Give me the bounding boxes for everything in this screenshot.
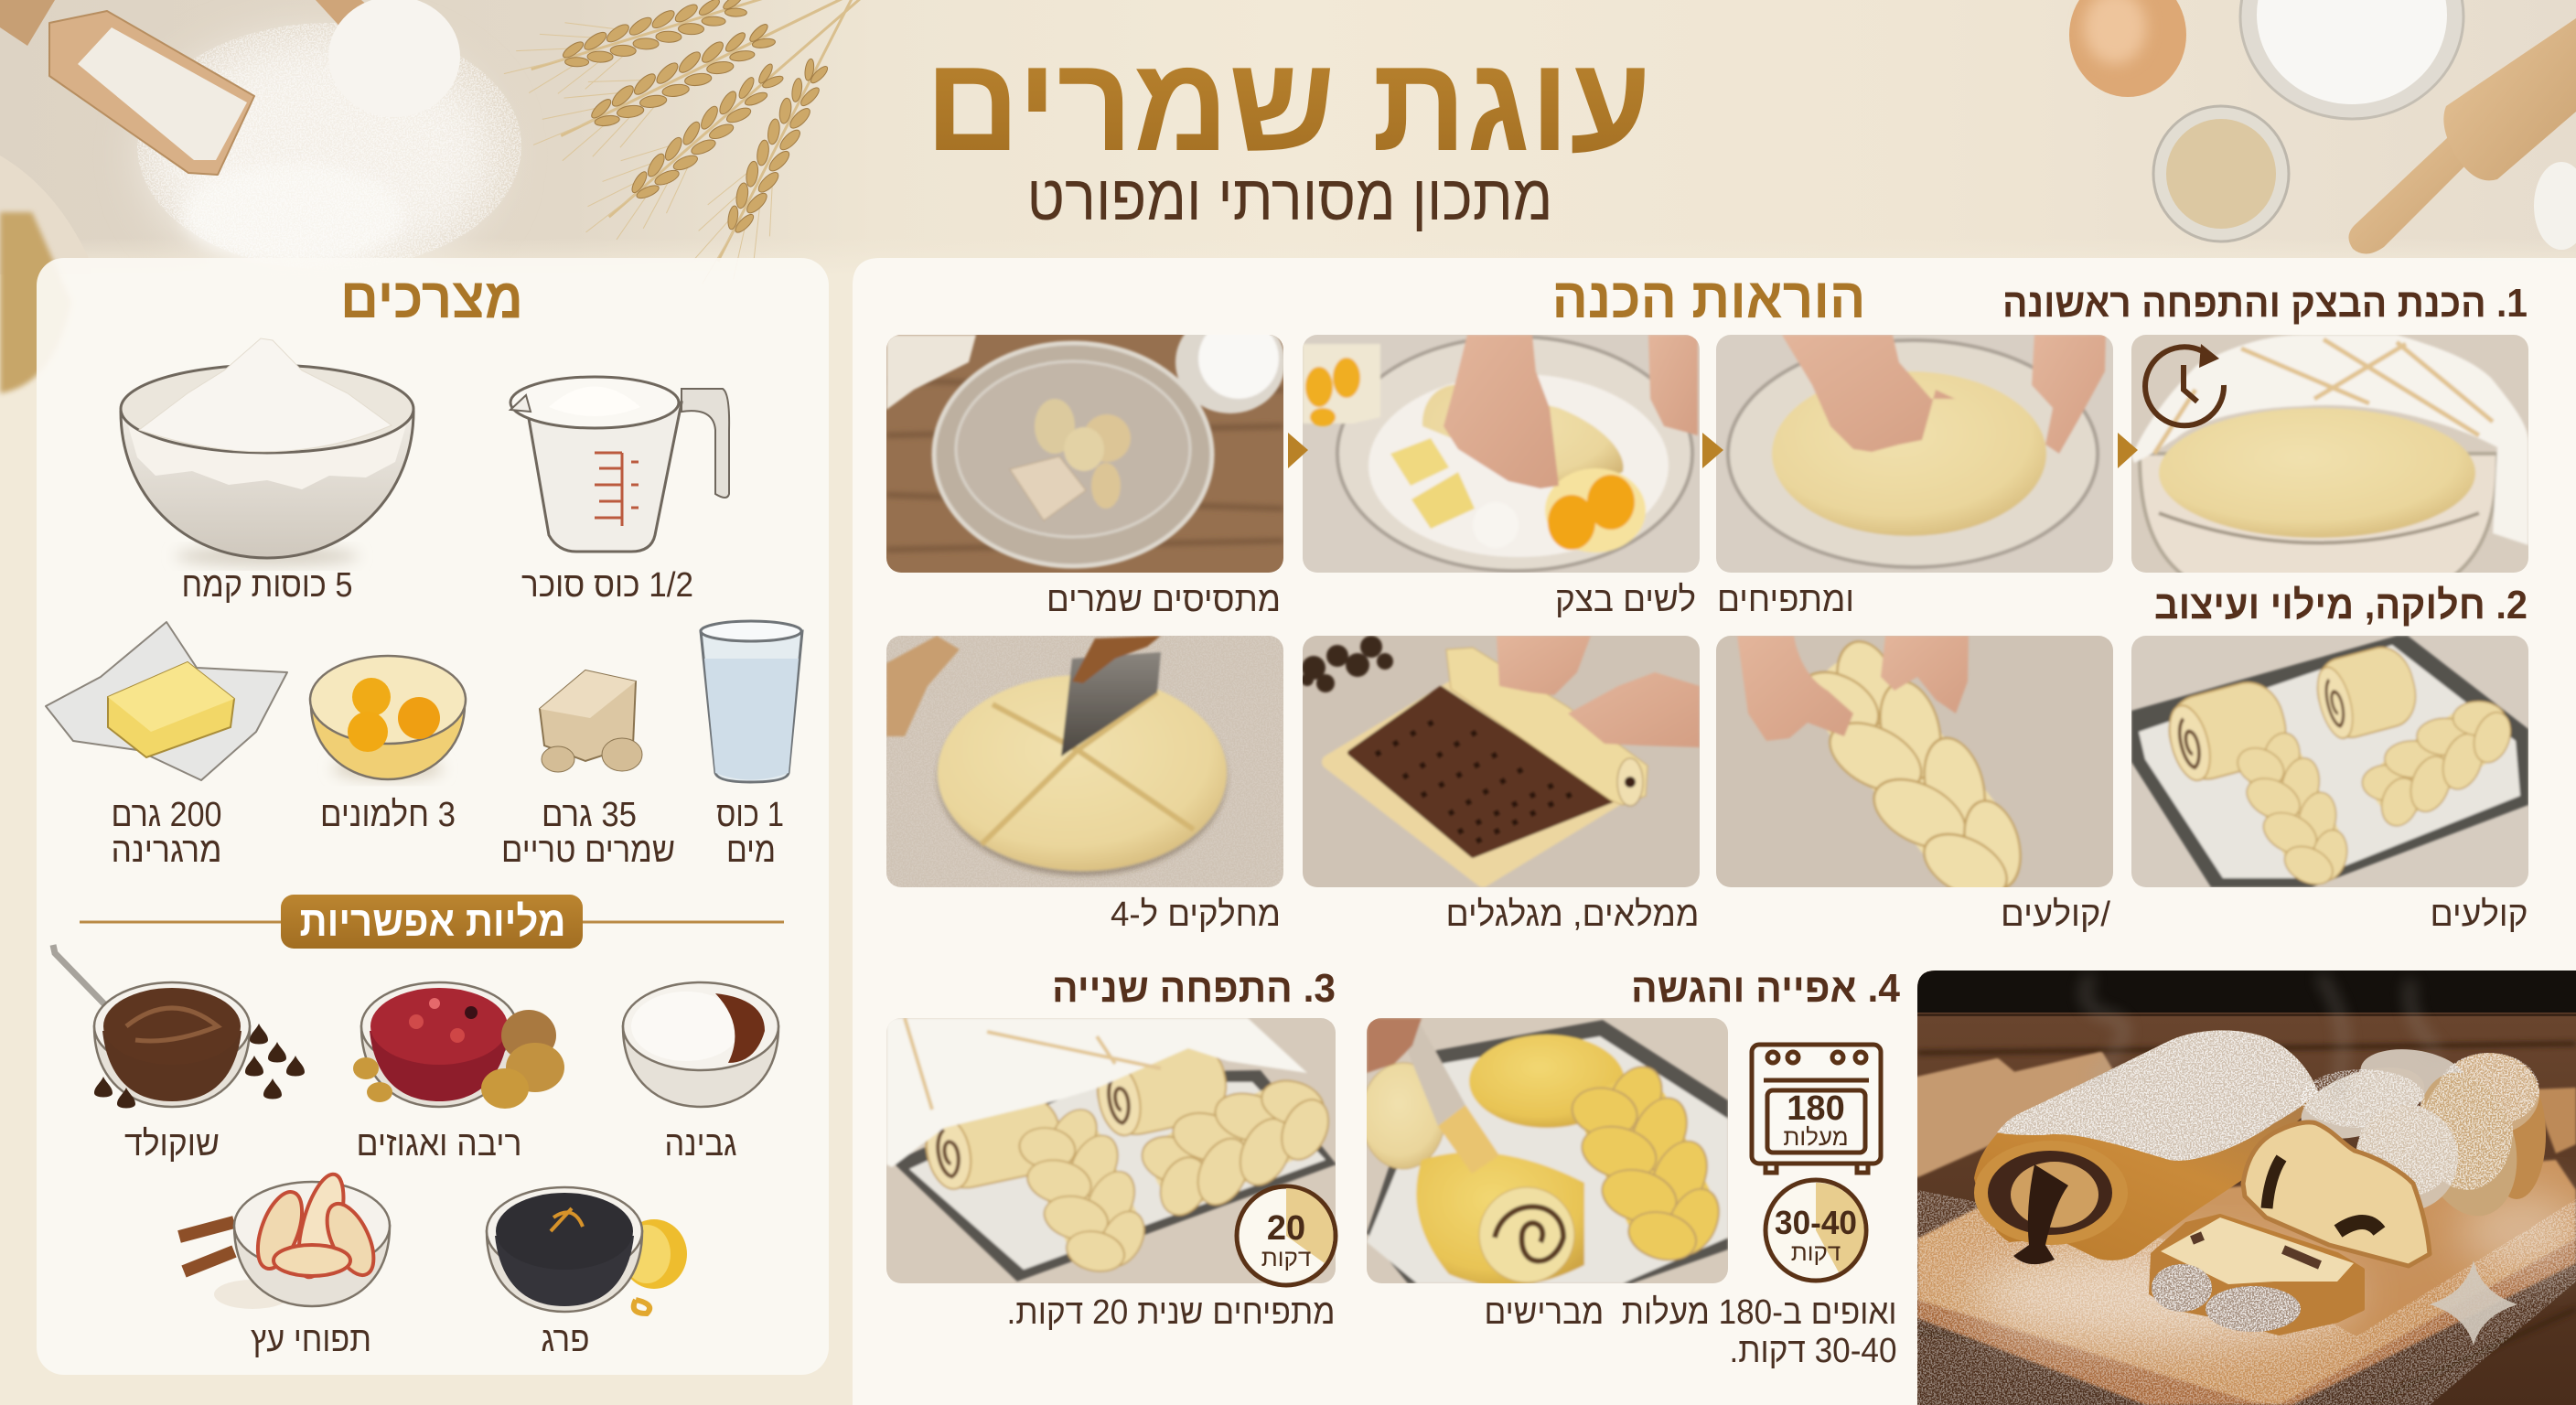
heading: step 2: 2. חלוקה, מילוי ועיצוב — [2154, 583, 2528, 627]
label: 5 כוסות קמח — [181, 566, 353, 605]
sparkle watermark — [2430, 1260, 2517, 1346]
caption: ואופים ב-180 מעלות מברישים — [1484, 1293, 1897, 1332]
heading: step 3: 3. התפחה שנייה — [1052, 966, 1336, 1011]
icon: apples and cinnamon — [179, 1170, 390, 1309]
photo: second rise — [886, 1018, 1357, 1298]
label: 35 גרם — [542, 796, 637, 834]
badge: optional fillings: מליות אפשריות — [300, 897, 565, 945]
caption: מתסיסים שמרים — [1046, 581, 1281, 619]
icon: rising timer — [2145, 344, 2224, 425]
label: מרגרינה — [112, 831, 221, 870]
photo: dividing dough — [886, 636, 1283, 887]
icon: measuring cup — [510, 377, 729, 552]
photo: dough rising under towel — [2131, 335, 2528, 573]
caption — [1484, 1293, 1897, 1370]
icon: poppy seeds and lemon — [487, 1187, 687, 1314]
label: תפוחי עץ — [251, 1321, 371, 1359]
photo: egg wash — [1367, 1018, 1728, 1283]
icon: margarine — [46, 622, 287, 780]
label: פרג — [542, 1321, 589, 1359]
photo: mixing ingredients — [1303, 335, 1700, 573]
cake slice — [2151, 1216, 2363, 1334]
caption: /קולעים — [2001, 896, 2110, 934]
arrow — [1702, 433, 1723, 468]
arrow — [1288, 433, 1308, 468]
label: 1/2 כוס סוכר — [521, 566, 693, 605]
icon: fresh yeast — [540, 670, 642, 772]
label: גבינה — [664, 1125, 737, 1164]
photo: filling and rolling — [1301, 636, 1700, 887]
photo: braiding dough — [1716, 636, 2113, 887]
badge: 30-40 minutes — [1766, 1180, 1866, 1281]
photo: shaped dough on tray — [2131, 636, 2538, 907]
icon: oven — [1752, 1045, 1881, 1173]
label — [501, 796, 675, 870]
heading: step 4: 4. אפייה והגשה — [1631, 966, 1900, 1011]
caption: מחלקים ל-4 — [1111, 896, 1281, 934]
decoration: flour, scoop, spoon and wheat — [0, 0, 907, 393]
icon: jam and walnuts — [353, 982, 564, 1109]
panel: instructions — [853, 258, 2576, 1405]
label: שוקולד — [124, 1125, 220, 1164]
icon: oven: מעלות — [1783, 1123, 1849, 1151]
heading: ingredients: מצרכים — [340, 267, 523, 330]
title: עוגת שמרים — [925, 28, 1651, 179]
label: 200 גרם — [111, 796, 221, 834]
photo: activating yeast — [886, 311, 1285, 573]
badge: 20 minutes — [1237, 1186, 1336, 1285]
label: 3 חלמונים — [320, 796, 456, 834]
icon: chocolate — [53, 945, 305, 1109]
icon: egg yolks — [310, 656, 466, 779]
photo: finished yeast cake — [1917, 971, 2576, 1405]
icon: glass of water — [701, 621, 802, 782]
icon: cheese and raisins — [623, 982, 778, 1107]
caption: ומתפיחים — [1717, 581, 1854, 619]
heading: instructions: הוראות הכנה — [1551, 267, 1866, 330]
caption: לשים בצק — [1555, 581, 1696, 619]
label: שמרים טריים — [501, 831, 675, 870]
caption: קולעים — [2430, 896, 2528, 934]
label — [111, 796, 221, 870]
arrow — [2118, 433, 2138, 468]
decoration: egg, sugar, yeast and rolling pin — [2069, 0, 2576, 254]
caption: 30-40 דקות. — [1729, 1332, 1897, 1370]
icon: oven: 180 — [1787, 1089, 1845, 1128]
badge: 20 minutes: 20 — [1267, 1209, 1305, 1248]
loaf: braided cake — [2243, 1043, 2546, 1266]
caption: ממלאים, מגלגלים — [1445, 896, 1700, 934]
label: ריבה ואגוזים — [357, 1125, 521, 1164]
loaf: rolled cake — [1974, 1030, 2318, 1264]
panel: ingredients — [37, 258, 829, 1375]
photo: kneading dough — [1716, 335, 2113, 573]
caption: מתפיחים שנית 20 דקות. — [1006, 1293, 1336, 1332]
label — [716, 796, 784, 870]
heading: step 1: 1. הכנת הבצק והתפחה ראשונה — [2002, 281, 2528, 326]
label: מים — [726, 831, 776, 870]
icon: flour bowl — [121, 338, 413, 565]
badge: 20 minutes: דקות — [1261, 1244, 1311, 1271]
subtitle: מתכון מסורתי ומפורט — [1026, 162, 1553, 233]
badge: 30-40 minutes: דקות — [1791, 1239, 1841, 1266]
badge: 30-40 minutes: 30-40 — [1775, 1204, 1857, 1241]
label: 1 כוס — [716, 796, 784, 834]
